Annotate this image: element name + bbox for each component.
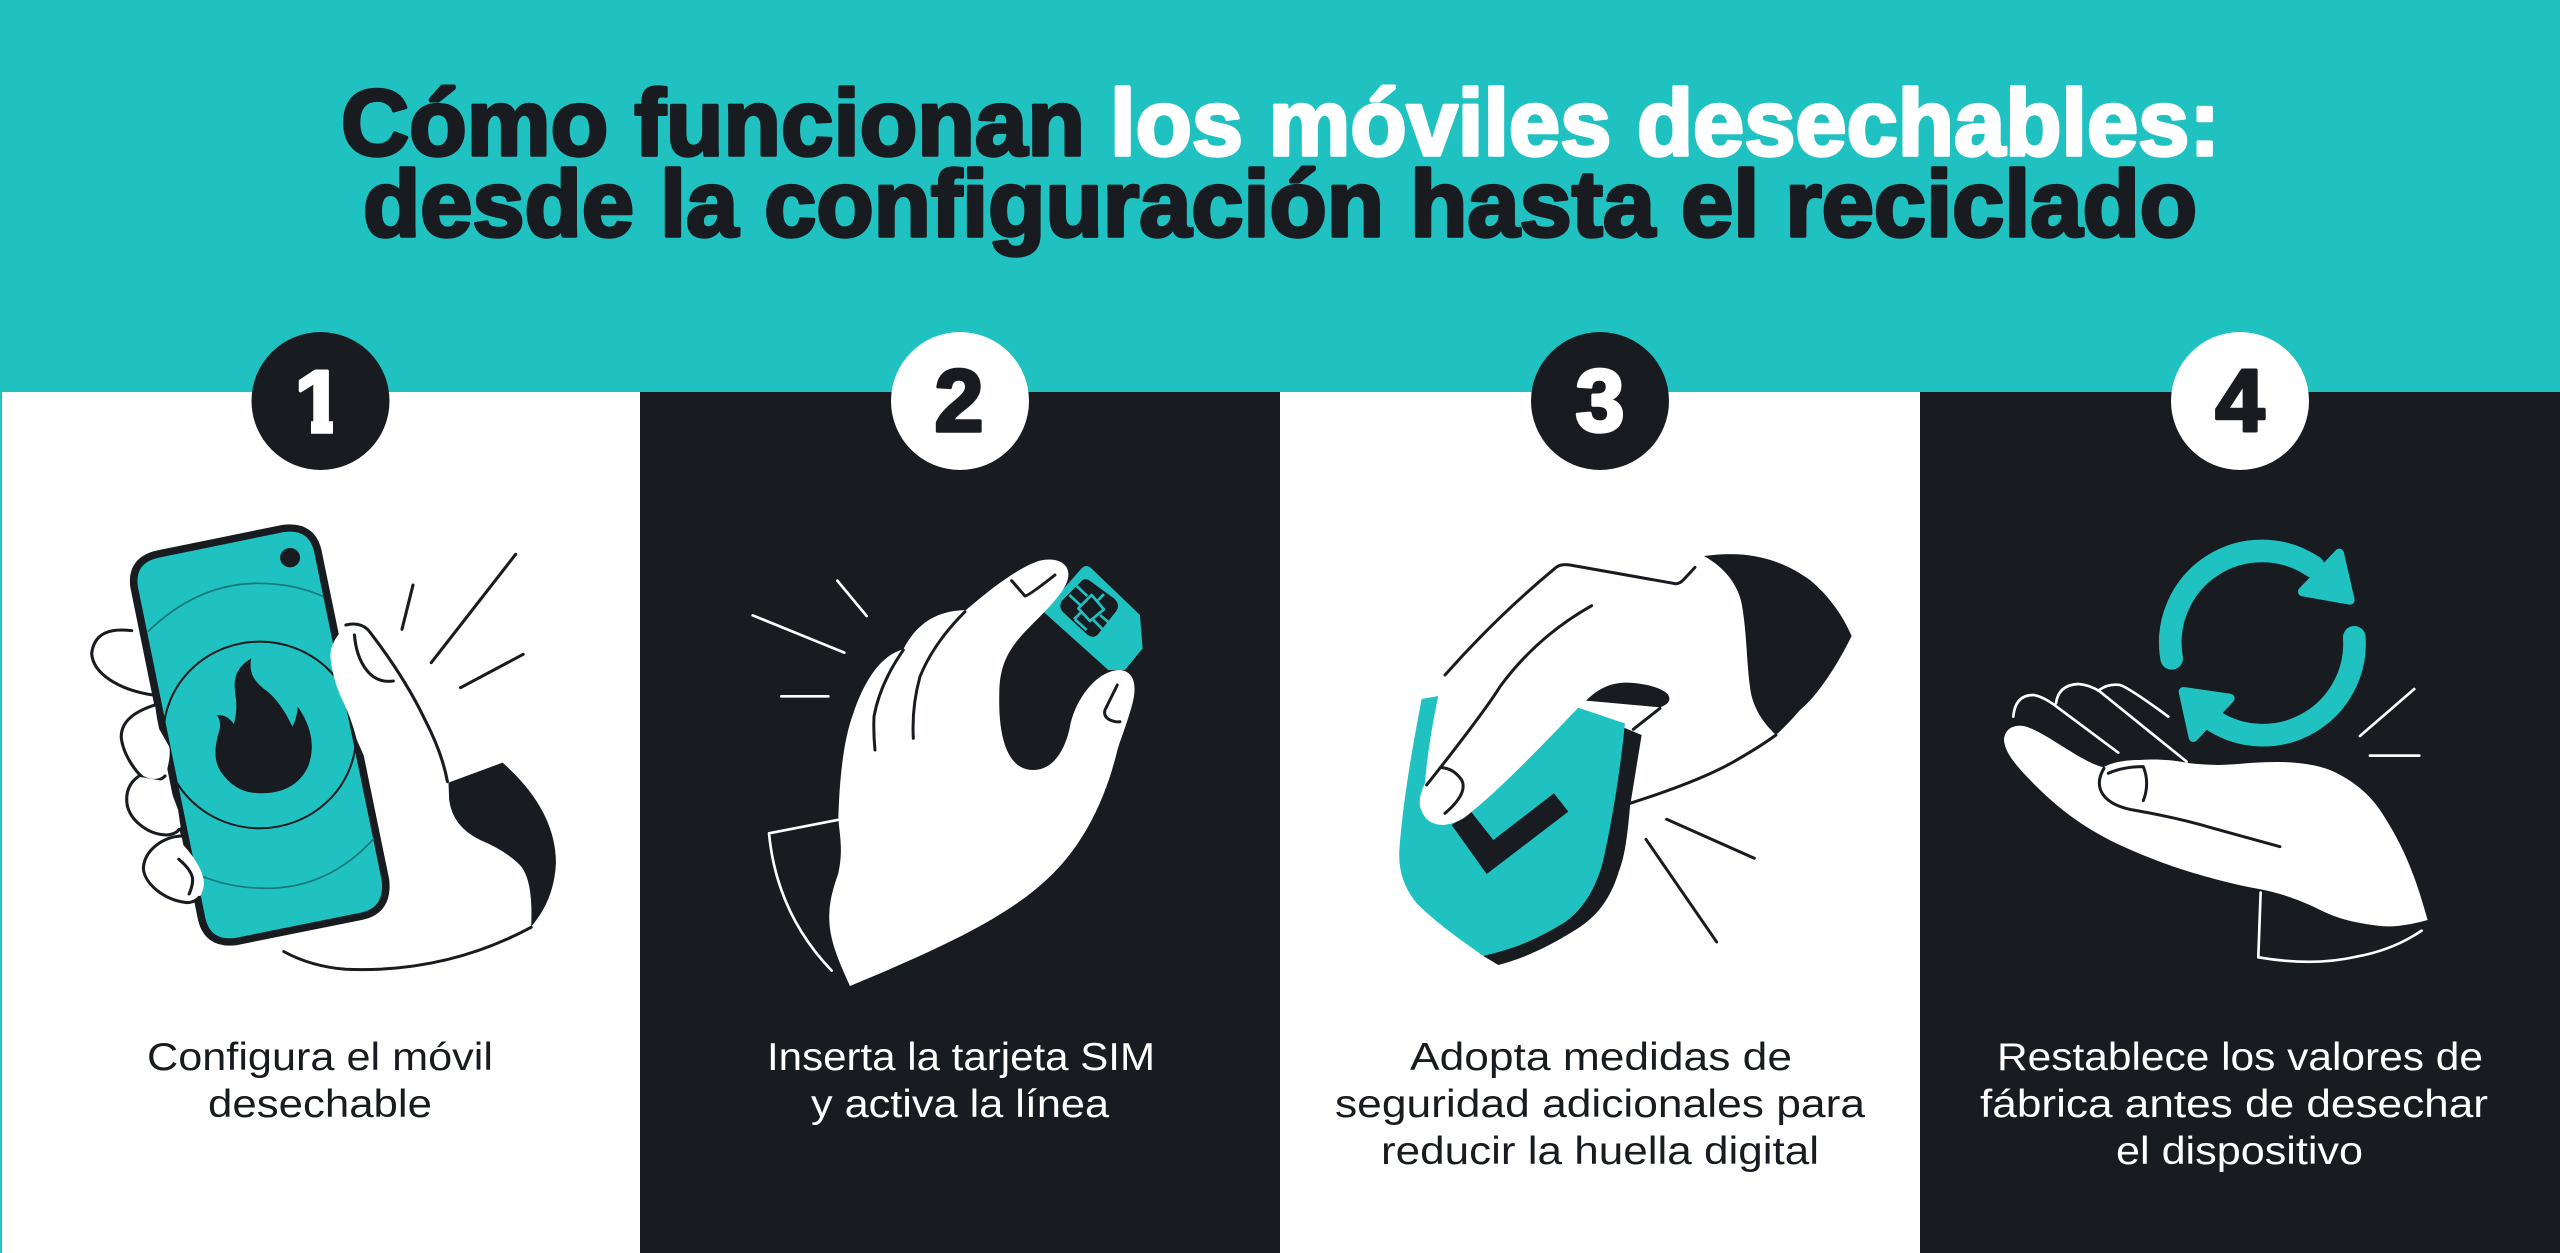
caption 4: el dispositivo xyxy=(2116,1130,2363,1173)
number badge 4 xyxy=(2171,332,2309,470)
title xyxy=(341,70,2220,256)
number badge 2 xyxy=(891,332,1029,470)
panel: step 1 xyxy=(0,332,556,1253)
number badge 1: 1 xyxy=(295,352,343,451)
caption 1 xyxy=(147,1036,493,1126)
header band xyxy=(0,0,2560,392)
icon: hand holding security shield xyxy=(1399,554,1852,965)
caption 1: Configura el móvil xyxy=(147,1036,493,1079)
number badge 1 xyxy=(252,332,390,470)
number badge 3 xyxy=(1531,332,1669,470)
number badge 2: 2 xyxy=(935,351,983,450)
panel: step 4 xyxy=(1920,332,2560,1253)
title: los móviles desechables: xyxy=(1110,70,2220,175)
panel: step 3 xyxy=(1280,332,1920,1253)
title: desde la configuración hasta el reciclado xyxy=(363,151,2197,256)
number badge 4: 4 xyxy=(2216,351,2265,450)
caption 2: y activa la línea xyxy=(811,1083,1109,1126)
caption 2: Inserta la tarjeta SIM xyxy=(767,1036,1155,1079)
caption 2 xyxy=(767,1036,1155,1126)
caption 4 xyxy=(1980,1036,2488,1173)
caption 3: reducir la huella digital xyxy=(1381,1130,1819,1173)
caption 3: seguridad adicionales para xyxy=(1335,1083,1865,1126)
caption 4: fábrica antes de desechar xyxy=(1980,1083,2488,1126)
caption 4: Restablece los valores de xyxy=(1997,1036,2483,1079)
icon: hand holding SIM card xyxy=(753,560,1143,986)
caption 1: desechable xyxy=(208,1083,432,1126)
number badge 3: 3 xyxy=(1576,351,1624,450)
title: Cómo funcionan xyxy=(341,70,1085,175)
caption 3: Adopta medidas de xyxy=(1410,1036,1792,1079)
caption 3 xyxy=(1335,1036,1865,1173)
icon: hand with recycling arrows xyxy=(2004,551,2428,962)
panel: step 2 xyxy=(640,332,1280,1253)
icon: hand holding phone with flame xyxy=(92,528,556,970)
